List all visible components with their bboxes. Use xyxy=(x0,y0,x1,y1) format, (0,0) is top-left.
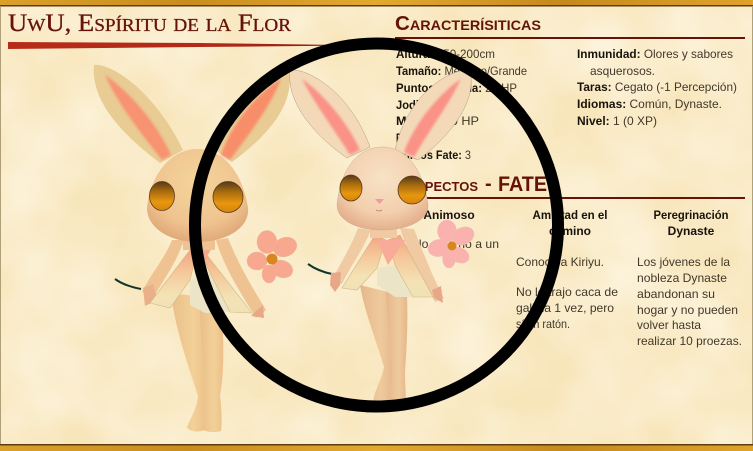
icon: left flower xyxy=(247,230,300,283)
stats column right: Nivel: 1 (0 XP) xyxy=(577,114,657,128)
bottom gold border xyxy=(0,444,753,451)
stats column right: Inmunidad: Olores y sabores xyxy=(577,47,733,61)
aspect column: amistad: camino xyxy=(549,224,591,238)
aspect column: peregrinación xyxy=(637,208,742,348)
aspect column: peregrinación: hogar y no pueden xyxy=(637,303,738,317)
stats column left: Tamaño: Mediano/Grande xyxy=(396,64,527,78)
stats column left: Jodido: 0 HP xyxy=(396,98,464,112)
aspect column: animoso xyxy=(404,208,499,251)
aspect column: amistad xyxy=(516,208,618,331)
heading: aspectos fate: FATE xyxy=(498,173,547,196)
stats column left: Mental: 20 HP xyxy=(396,114,479,128)
aspect column: animoso: Animoso xyxy=(423,208,475,222)
stats column left: Rasgos: 3 xyxy=(396,131,438,145)
heading: aspectos fate xyxy=(402,173,547,196)
rule: características xyxy=(395,37,745,39)
title: UwU, Espíritu de la Flor xyxy=(8,10,291,37)
aspect column: peregrinación: Los jóvenes de la xyxy=(637,255,730,269)
stats column left: Altura: 150-200cm xyxy=(396,47,495,61)
top gold border xyxy=(0,0,753,6)
aspect column: amistad: Amistad en el xyxy=(532,208,608,222)
aspect column: peregrinación: Dynaste xyxy=(668,224,715,238)
title rule xyxy=(8,42,340,49)
stats column right: asquerosos. xyxy=(590,64,655,78)
stats column left xyxy=(396,47,527,162)
heading: características: Caracterísiticas xyxy=(395,13,541,35)
aspect column: animoso: Solo digo no a un xyxy=(404,237,499,251)
aspect column: peregrinación: volver hasta xyxy=(637,318,701,332)
rule: aspectos xyxy=(395,197,745,199)
aspect column: amistad: No le trajo caca de xyxy=(516,285,618,299)
figure: left rabbit spirit xyxy=(94,65,290,432)
aspect column: peregrinación: nobleza Dynaste xyxy=(637,271,727,285)
aspect column: peregrinación: realizar 10 proezas. xyxy=(637,334,742,348)
heading: aspectos fate: - xyxy=(485,173,492,195)
black ring xyxy=(195,44,558,406)
figure: right rabbit spirit xyxy=(290,70,471,403)
stats column left: Puntos de Vida: 20 HP xyxy=(396,81,517,95)
aspect column: amistad: Conoce a Kiriyu. xyxy=(516,255,604,269)
stats column left: Puntos Fate: 3 xyxy=(396,148,471,162)
aspect column: amistad: sí un ratón. xyxy=(516,317,570,331)
heading: aspectos fate: Aspectos xyxy=(402,175,478,196)
aspect column: peregrinación: abandonan su xyxy=(637,287,715,301)
stats column right: Idiomas: Común, Dynaste. xyxy=(577,97,722,111)
aspect column: amistad: gallina 1 vez, pero xyxy=(516,301,614,315)
aspect column: peregrinación: Peregrinación xyxy=(654,208,728,222)
icon: right flower xyxy=(427,220,477,268)
stats column right xyxy=(577,47,737,128)
stats column right: Taras: Cegato (-1 Percepción) xyxy=(577,80,737,94)
